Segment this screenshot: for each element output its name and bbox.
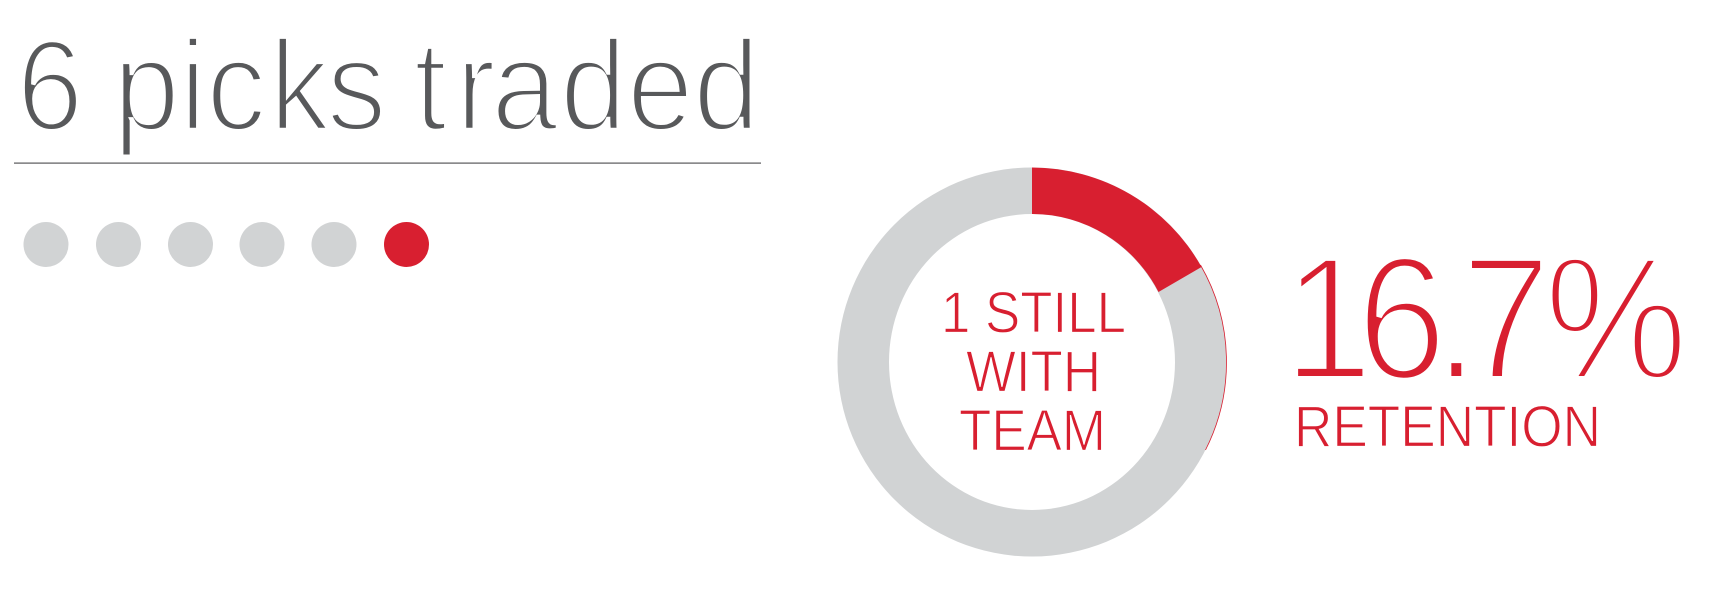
donut chart: 16.7% retained [838, 168, 1226, 556]
label line: WITH: WITH [966, 340, 1101, 404]
title: 6 picks traded: 6 picks traded [17, 14, 760, 158]
donut edge: thin red hairline [1200, 265, 1226, 450]
dot: traded pick 3 [168, 222, 213, 267]
donut ring: gray remainder [838, 168, 1226, 556]
big number: 16.7%: 16.7% [1283, 220, 1688, 416]
label line: 1 STILL: 1 STILL [941, 280, 1126, 346]
title rule [14, 162, 761, 164]
dot: pick still with team [384, 222, 429, 267]
dot: traded pick 4 [240, 222, 284, 267]
donut wedge: red retained share [1032, 168, 1202, 292]
dot: traded pick 1 [24, 222, 68, 267]
donut label: 1 still with team [941, 280, 1126, 464]
label line: TEAM: TEAM [959, 398, 1106, 464]
dot: traded pick 2 [96, 222, 141, 267]
dot: traded pick 5 [312, 222, 356, 267]
caption: RETENTION: RETENTION [1294, 394, 1601, 460]
dot row: five gray picks and one red pick [24, 222, 429, 267]
